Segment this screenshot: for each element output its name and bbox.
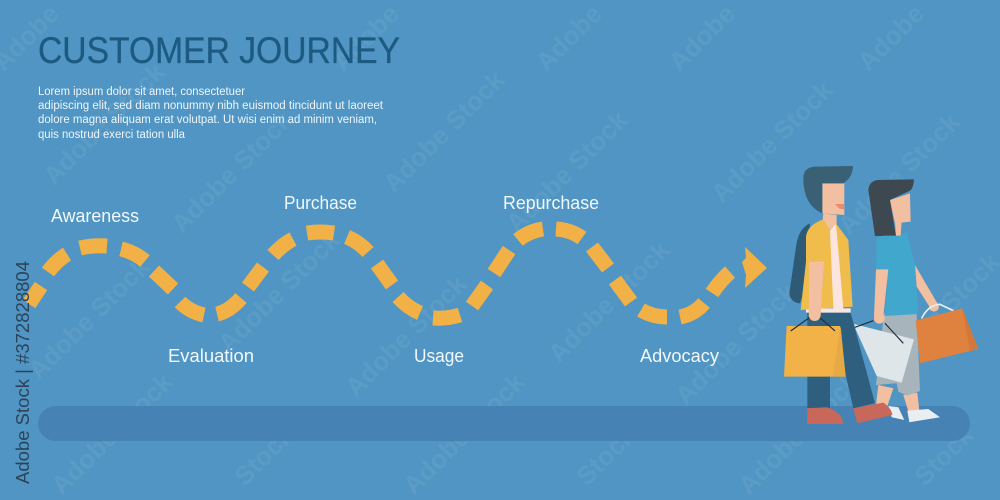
infographic canvas: Adobe Stock — [165, 104, 299, 238]
orange shopping bag — [916, 304, 978, 363]
infographic canvas: Adobe Stock — [212, 224, 346, 358]
infographic canvas: Adobe — [851, 0, 930, 77]
man — [789, 166, 892, 424]
yellow shopping bag — [784, 318, 846, 377]
infographic canvas: Adobe Stock — [669, 276, 803, 410]
label: Usage: Usage — [414, 346, 464, 366]
infographic canvas: Stock — [908, 420, 980, 491]
intro paragraph: adipiscing elit, sed diam nonummy nibh euismod tincidunt ut laoreet — [38, 100, 384, 112]
infographic canvas: Adobe — [662, 0, 741, 77]
label: Awareness: Awareness — [51, 206, 139, 226]
infographic canvas: Adobe Stock — [705, 74, 839, 208]
infographic canvas: Stock — [228, 420, 300, 491]
label: Advocacy: Advocacy — [640, 346, 719, 366]
infographic canvas: Adobe Stock — [732, 366, 866, 500]
infographic canvas: Adobe — [326, 0, 405, 77]
infographic canvas: Adobe Stock — [37, 56, 171, 190]
stock image id: Adobe Stock | #372828804 — [13, 261, 33, 484]
infographic canvas: Adobe Stock — [45, 366, 179, 500]
label: Repurchase: Repurchase — [503, 193, 599, 213]
infographic canvas: Stock — [570, 420, 642, 491]
infographic canvas: Adobe Stock — [832, 106, 966, 240]
ground bar — [38, 406, 970, 441]
title: CUSTOMER JOURNEY — [38, 30, 400, 71]
label: Purchase: Purchase — [284, 193, 357, 213]
infographic canvas: Adobe Stock — [397, 366, 531, 500]
arrowhead — [742, 247, 767, 288]
intro paragraph: Lorem ipsum dolor sit amet, consectetuer — [38, 86, 245, 98]
intro paragraph: quis nostrud exerci tation ulla — [38, 129, 186, 141]
infographic canvas: Adobe Stock — [542, 234, 676, 368]
dashed journey path — [29, 229, 730, 318]
infographic canvas: Adobe Stock — [22, 251, 156, 385]
white shopping bag — [854, 321, 914, 383]
infographic canvas: Adobe Stock — [377, 64, 511, 198]
intro paragraph: dolore magna aliquam erat volutpat. Ut wisi enim ad minim veniam, — [38, 114, 377, 126]
intro paragraph — [38, 86, 384, 141]
stage labels — [51, 193, 719, 366]
woman — [868, 179, 940, 422]
infographic canvas: Adobe — [529, 0, 608, 77]
label: Evaluation: Evaluation — [168, 346, 254, 366]
illustration: shopping couple — [784, 166, 978, 424]
infographic canvas: Adobe Stock — [500, 104, 634, 238]
infographic canvas: Adobe Stock — [339, 268, 473, 402]
